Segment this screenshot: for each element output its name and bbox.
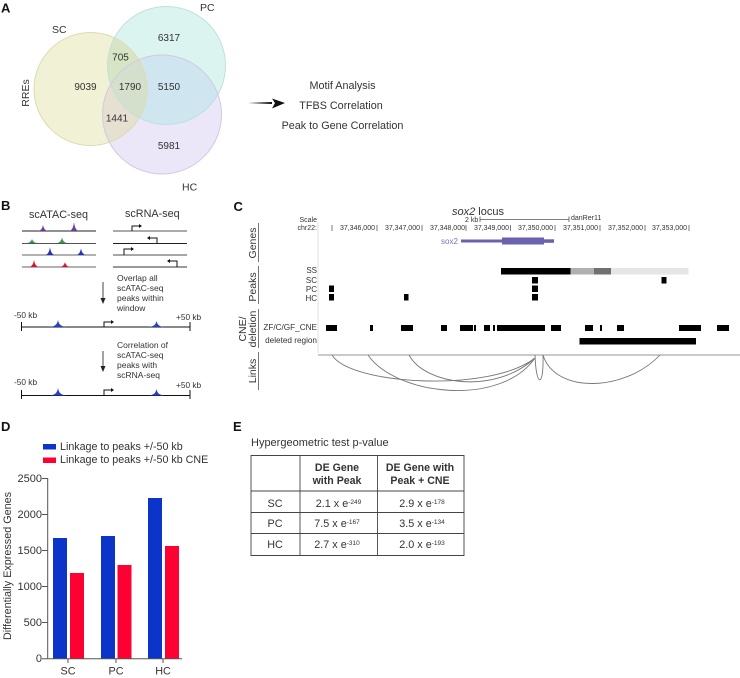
peak track labels: HC <box>305 294 317 303</box>
p-values: 2.9 x e <box>399 498 432 510</box>
venn counts: 5150 <box>158 82 181 93</box>
bars <box>53 498 179 659</box>
window diagram 1: +50 kb <box>176 312 202 322</box>
CNE track labels: ZF/C/GF_CNE <box>263 323 318 332</box>
p-values: -193 <box>432 540 445 547</box>
browser axes <box>317 222 319 353</box>
peak track labels: SC <box>306 276 317 285</box>
legend: Linkage to peaks +/-50 kb CNE <box>60 454 208 466</box>
p-values <box>314 498 445 551</box>
column headers: DE Gene with <box>386 462 454 474</box>
p-values: -310 <box>347 540 360 547</box>
p-values: 2.7 x e <box>314 539 347 551</box>
down arrow: overlap <box>100 282 106 304</box>
section labels: Genes <box>247 228 259 258</box>
CNE track labels: deleted region <box>265 336 317 345</box>
CNE track <box>326 325 729 331</box>
table title: Hypergeometric test p-value <box>251 437 389 449</box>
venn set labels: RREs <box>20 79 32 107</box>
peak tracks <box>329 268 688 300</box>
section labels <box>237 228 259 383</box>
p-values: -249 <box>348 499 362 506</box>
scale bar <box>299 215 601 224</box>
y tick labels: 0 <box>36 653 42 665</box>
correlation caption <box>117 340 169 380</box>
deleted region bar <box>580 338 696 344</box>
x tick labels <box>60 666 171 678</box>
y tick labels: 1500 <box>18 545 42 557</box>
y tick labels: 2000 <box>18 509 42 521</box>
analyses list: TFBS Correlation <box>299 100 383 112</box>
venn set labels <box>20 2 215 194</box>
chromosome ruler: 37,347,000 <box>385 225 420 232</box>
section labels: Links <box>247 359 259 383</box>
section rules <box>258 223 260 390</box>
overlap caption: Overlap all <box>117 273 158 283</box>
x tick labels: HC <box>155 666 171 678</box>
window diagram 1 <box>14 310 202 331</box>
overlap caption: scATAC-seq <box>117 283 164 293</box>
window diagram 2: +50 kb <box>176 380 202 390</box>
venn counts <box>74 33 181 152</box>
baseline <box>318 354 740 356</box>
p-values: -134 <box>432 519 445 526</box>
y axis title: Differentially Expressed Genes <box>2 491 14 640</box>
row labels <box>267 498 283 551</box>
panel D: bar chart <box>1 419 208 678</box>
analyses list <box>282 80 403 132</box>
row labels: HC <box>267 539 283 551</box>
column headers: Peak + CNE <box>390 475 450 487</box>
scATAC-seq and scRNA-seq headings: scRNA-seq <box>125 208 180 220</box>
window diagram 2: -50 kb <box>14 377 37 387</box>
panel C: sox2 genome browser <box>234 199 740 391</box>
panel B: workflow schematic <box>1 198 202 399</box>
scATAC-seq and scRNA-seq headings: scATAC-seq <box>29 209 88 221</box>
column headers: with Peak <box>312 475 362 487</box>
overlap caption <box>116 273 164 313</box>
panel letter E: E <box>233 419 242 434</box>
window diagram 1: -50 kb <box>14 310 37 320</box>
y tick labels <box>18 473 42 665</box>
panel letter B: B <box>1 198 10 213</box>
p-values: 2.1 x e <box>316 498 348 510</box>
scale bar: 2 kb <box>465 217 478 224</box>
p-values: 2.0 x e <box>399 539 432 551</box>
scATAC-seq and scRNA-seq headings <box>29 208 180 221</box>
venn set labels: PC <box>200 2 215 14</box>
chromosome ruler: 37,352,000 <box>608 225 643 232</box>
p-values: 3.5 x e <box>399 518 432 530</box>
panel letter A: A <box>1 0 11 16</box>
chromosome ruler: 37,351,000 <box>563 225 598 232</box>
venn circles <box>34 6 226 174</box>
overlap caption: peaks within <box>117 293 164 303</box>
down arrow: correlation <box>100 351 106 372</box>
window diagram 2 <box>14 377 202 399</box>
peak track labels: PC <box>306 285 317 294</box>
y tick labels: 1000 <box>18 581 42 593</box>
correlation caption: scRNA-seq <box>117 370 160 380</box>
panel letter D: D <box>1 419 10 434</box>
overlap caption: window <box>116 303 146 313</box>
chromosome ruler: 37,350,000 <box>518 225 553 232</box>
CNE track labels <box>263 323 318 345</box>
y tick labels: 2500 <box>18 473 42 485</box>
scale bar: danRer11 <box>571 215 601 222</box>
sox2 gene model <box>441 237 554 246</box>
section labels: Peaks <box>247 272 259 302</box>
x tick labels: PC <box>108 666 124 678</box>
analyses list: Motif Analysis <box>309 80 376 92</box>
venn counts: 5981 <box>158 141 181 152</box>
analyses list: Peak to Gene Correlation <box>282 120 403 132</box>
correlation caption: Correlation of <box>117 340 169 350</box>
table grid <box>251 456 464 556</box>
section labels: deletion <box>247 310 259 347</box>
venn counts: 6317 <box>158 33 181 44</box>
peak track labels: SS <box>306 266 317 275</box>
chromosome ruler: 37,346,000 <box>340 225 375 232</box>
x tick labels: SC <box>60 666 76 678</box>
p-values: -167 <box>347 519 360 526</box>
scale bar: Scale <box>299 217 317 224</box>
axes <box>42 478 182 663</box>
scRNA-seq tracks with promoter arrows <box>113 224 187 267</box>
venn counts: 9039 <box>74 82 97 93</box>
venn counts: 1790 <box>119 82 142 93</box>
legend <box>43 441 208 466</box>
locus title: sox2 locus <box>452 206 504 218</box>
chromosome ruler: chr22: <box>298 225 317 232</box>
p-values: 7.5 x e <box>314 518 347 530</box>
venn set labels: HC <box>182 182 198 194</box>
venn counts: 1441 <box>106 114 129 124</box>
venn counts: 705 <box>112 52 129 64</box>
scATAC-seq tracks with peaks <box>22 222 96 267</box>
sox2 gene model: sox2 <box>441 237 458 246</box>
y tick labels: 500 <box>24 617 42 629</box>
arrow to analyses <box>248 98 285 108</box>
panel E: p-value table <box>233 419 464 556</box>
correlation caption: scATAC-seq <box>117 350 164 360</box>
row labels: PC <box>268 518 283 530</box>
column headers <box>312 462 454 487</box>
p-values: -178 <box>432 499 445 506</box>
link arcs <box>332 355 660 391</box>
panel letter C: C <box>234 199 244 214</box>
chromosome ruler: 37,348,000 <box>430 225 465 232</box>
panel A: Venn diagram <box>1 0 403 194</box>
chromosome ruler <box>298 225 689 232</box>
legend: Linkage to peaks +/-50 kb <box>60 441 183 453</box>
chromosome ruler: 37,353,000 <box>652 225 687 232</box>
peak track labels <box>305 266 317 303</box>
venn set labels: SC <box>52 24 67 36</box>
chromosome ruler: 37,349,000 <box>474 225 509 232</box>
section labels: CNE/ <box>237 316 249 342</box>
correlation caption: peaks with <box>117 360 157 370</box>
row labels: SC <box>268 498 283 510</box>
column headers: DE Gene <box>315 462 359 474</box>
